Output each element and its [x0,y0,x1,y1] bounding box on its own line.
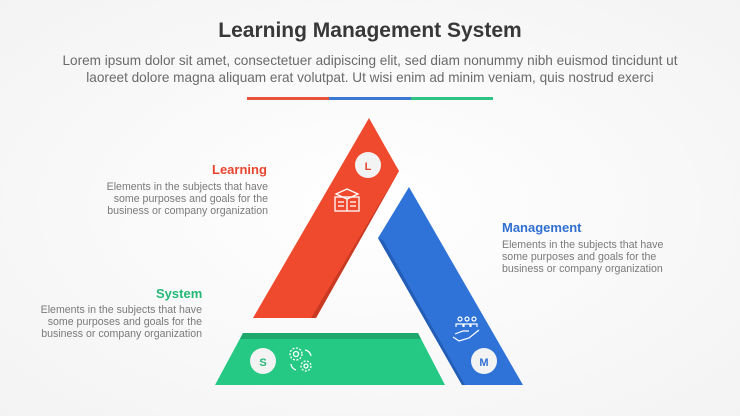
color bar [247,97,493,100]
subtitle: laoreet dolore magna aliquam erat volutpat. Ut wisi enim ad minim veniam, quis nostrud exerci [86,70,654,85]
text: system: business or company organization [41,328,202,340]
text: management: some purposes and goals for the [502,251,656,263]
circle S: S [259,357,267,369]
subtitle [62,53,678,85]
text: learning: business or company organization [107,205,268,217]
text: system: some purposes and goals for the [48,316,202,328]
text: system: Elements in the subjects that have [41,304,202,316]
bar: management [378,187,523,385]
bar: system [215,333,445,385]
text: learning: Elements in the subjects that have [107,181,268,193]
circle M: M [479,357,489,369]
text: management: business or company organization [502,263,663,275]
icon: graduation book [335,189,359,211]
heading: learning: Learning [212,162,267,177]
circle M [471,348,497,374]
heading: management: Management [502,220,581,235]
subtitle: Lorem ipsum dolor sit amet, consectetuer adipiscing elit, sed diam nonummy nibh euismod tincidunt ut [62,53,678,68]
text: learning [107,181,268,217]
text: management [502,239,663,275]
circle S [250,348,276,374]
circle L: L [365,161,372,173]
heading: system: System [156,286,202,301]
text: management: Elements in the subjects that have [502,239,663,251]
title: Learning Management System [218,19,522,42]
text: learning: some purposes and goals for the [114,193,268,205]
bar: learning [253,118,399,318]
text: system [41,304,202,340]
circle L [355,152,381,178]
icon: gears [290,348,311,371]
icon: people hand [453,317,479,341]
